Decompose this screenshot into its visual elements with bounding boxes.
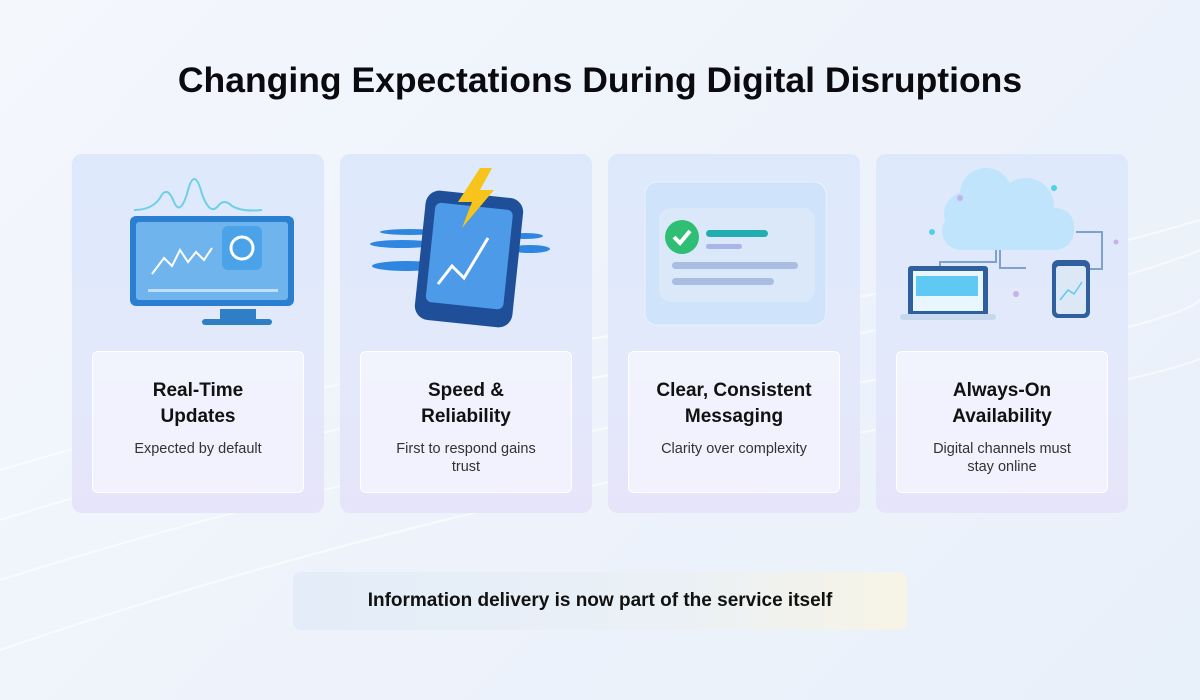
icon: monitor with refresh (130, 178, 294, 325)
text box: Updates (161, 406, 235, 427)
text box: Digital channels must (933, 441, 1071, 457)
panel: clear messaging (608, 154, 860, 513)
callout: bottom statement: Information delivery is now part of the service itself (368, 590, 832, 611)
text box: Speed & (428, 380, 504, 401)
panel: always-on availability (876, 154, 1128, 513)
text box: Messaging (685, 406, 783, 427)
text box: Always-On (953, 380, 1051, 401)
text box: Real-Time (153, 380, 243, 401)
callout: bottom statement (293, 572, 907, 630)
text box: trust (452, 459, 480, 475)
text box: Clarity over complexity (661, 441, 807, 457)
text box: Availability (952, 406, 1052, 427)
icon: cloud with devices (900, 168, 1118, 320)
text box: Clear, Consistent (656, 380, 812, 401)
panel: real-time updates (72, 154, 324, 513)
title: Changing Expectations During Digital Disruptions (178, 60, 1022, 100)
text box: First to respond gains (396, 441, 536, 457)
icon: message card with check (644, 182, 826, 326)
icon: phone with lightning (370, 168, 550, 328)
text box: stay online (967, 459, 1037, 475)
text box (628, 351, 840, 493)
text box: Reliability (421, 406, 511, 427)
text box (896, 351, 1108, 493)
panel: speed & reliability (340, 154, 592, 513)
text box (92, 351, 304, 493)
text box (360, 351, 572, 493)
text box: Expected by default (134, 441, 262, 457)
